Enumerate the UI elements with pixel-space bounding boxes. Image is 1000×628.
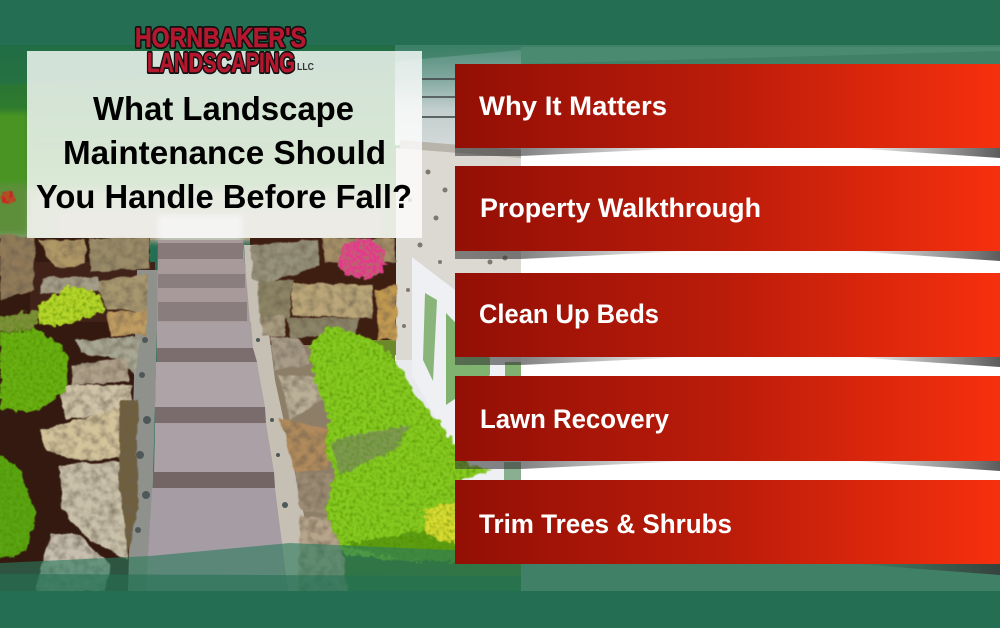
logo <box>135 22 314 78</box>
green shrubs <box>0 285 490 562</box>
pale lawn and walk under title panel <box>30 190 400 242</box>
bottom green tint <box>0 543 521 591</box>
top green tint <box>0 45 521 85</box>
logo first line shadow: HORNBAKER'S <box>135 22 306 53</box>
house siding <box>395 45 521 166</box>
bar: Lawn Recovery <box>455 376 1000 461</box>
pink flowering shrub <box>338 239 386 279</box>
bar: Trim Trees & Shrubs <box>455 480 1000 564</box>
stone steps <box>146 240 288 591</box>
logo second line shadow: LANDSCAPING <box>147 47 295 78</box>
window <box>412 257 521 480</box>
hedge backdrop <box>0 45 521 240</box>
red flowers <box>1 190 15 204</box>
title line 3: You Handle Before Fall? <box>36 178 412 215</box>
mulch beds <box>30 262 155 322</box>
bar: Trim Trees & Shrubs: Trim Trees & Shrubs <box>479 509 732 539</box>
bar: Lawn Recovery: Lawn Recovery <box>480 404 669 434</box>
bottom translucent band <box>521 564 1000 591</box>
title line 1: What Landscape <box>93 90 354 127</box>
logo second line: LANDSCAPING <box>147 47 295 78</box>
title panel <box>27 51 422 238</box>
landscape photo <box>0 45 521 592</box>
bar: Why It Matters <box>455 64 1000 148</box>
bar: Clean Up Beds: Clean Up Beds <box>479 299 659 329</box>
bar: Clean Up Beds <box>455 273 1000 357</box>
title <box>36 90 412 215</box>
title line 2: Maintenance Should <box>63 134 386 171</box>
logo first line: HORNBAKER'S <box>135 22 306 53</box>
white panel behind bars <box>521 64 1000 564</box>
bright foliage at left <box>0 112 28 234</box>
bar shadows <box>455 148 1000 575</box>
top translucent band <box>521 45 1000 64</box>
bar: Property Walkthrough: Property Walkthrough <box>480 193 761 223</box>
photo ground base <box>0 238 521 591</box>
logo suffix: LLC <box>297 62 314 73</box>
bar: Property Walkthrough <box>455 166 1000 251</box>
stone wall <box>396 148 521 360</box>
bar: Why It Matters: Why It Matters <box>479 91 667 121</box>
pebble strips <box>128 245 306 591</box>
boulders <box>0 236 397 592</box>
